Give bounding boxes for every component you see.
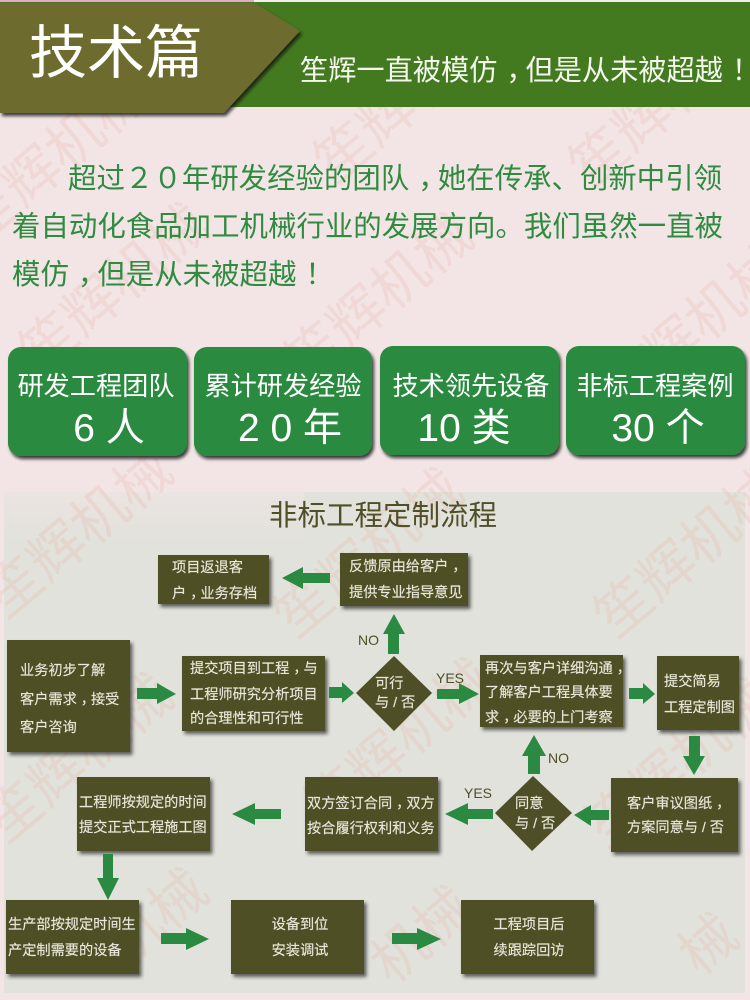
decision: agree: 同意 (515, 795, 543, 812)
label: YES: YES (464, 785, 492, 801)
stat card: team: 6 人 (73, 407, 145, 450)
box: return project: 户 ，业务存档 (172, 585, 257, 602)
stat card: equipment: 技术领先设备 (392, 371, 550, 401)
box: formal drawing (77, 777, 210, 851)
box: install (231, 900, 364, 974)
box: install: 设备到位 (272, 916, 328, 933)
header tab (0, 3, 300, 113)
header banner (0, 0, 750, 113)
decision: feasible (356, 656, 432, 731)
arrow: down to review (683, 736, 705, 775)
arrow: to formal drawing (232, 803, 281, 825)
stat card: experience: 2 0 年 (238, 407, 342, 450)
box: initial understanding: 客户咨询 (20, 719, 77, 736)
box: production: 产定制需要的设备 (8, 942, 122, 959)
decision: agree: 与 / 否 (515, 816, 555, 832)
box: customer review (611, 778, 738, 852)
arrow: to communicate (437, 683, 479, 704)
watermarks: 笙辉机械 (272, 202, 484, 394)
watermarks: 机械 (358, 875, 485, 995)
slogan: 笙辉一直被模仿 ，但是从未被超越 ！ (300, 54, 750, 86)
decision: agree (495, 776, 572, 851)
stat card: team: 研发工程团队 (17, 371, 175, 401)
main title: 技术篇 (29, 21, 203, 86)
box: submit to engineering: 工程师研究分析项目 (190, 687, 318, 703)
stat card: equipment (380, 346, 559, 455)
arrow: to drawing (629, 683, 655, 704)
box: customer review: 方案同意与 / 否 (627, 819, 724, 836)
arrow: to follow up (392, 928, 441, 950)
box: feedback: 提供专业指导意见 (349, 584, 463, 601)
stat card: experience: 累计研发经验 (204, 371, 362, 401)
box: contract (305, 777, 438, 851)
intro paragraph: 超过２０年研发经验的团队 ，她在传承、创新中引领 (68, 163, 722, 195)
box: return project (158, 555, 269, 604)
box: submit to engineering: 的合理性和可行性 (190, 711, 304, 727)
box: production (6, 900, 139, 974)
decision: feasible: 可行 (375, 676, 403, 692)
box: follow up: 续跟踪回访 (494, 942, 564, 959)
box: initial understanding: 业务初步了解 (20, 662, 105, 679)
intro paragraph (12, 163, 723, 291)
intro paragraph: 模仿 ，但是从未被超越 ！ (12, 259, 334, 291)
arrow: up to feedback (383, 614, 405, 654)
box: feedback (340, 553, 468, 606)
box: production: 生产部按规定时间生 (8, 917, 136, 933)
box: formal drawing: 工程师按规定的时间 (79, 795, 207, 811)
box: customer review: 客户审议图纸 ， (627, 795, 730, 812)
stat card: cases: 30 个 (611, 407, 705, 450)
box: return project: 项目返退客 (172, 559, 243, 576)
box: simple drawing: 工程定制图 (664, 700, 735, 716)
box: communicate: 求 ，必要的上门考察 (485, 709, 613, 726)
stat card: experience (194, 347, 372, 456)
box: communicate: 了解客户工程具体要 (485, 684, 613, 701)
stat card: equipment: 10 类 (417, 407, 511, 450)
box: follow up (461, 900, 594, 974)
decision: feasible: 与 / 否 (375, 695, 415, 711)
box: install: 安装调试 (272, 943, 328, 959)
stat card: cases (566, 346, 745, 455)
arrow: up to communicate (522, 735, 546, 774)
stat card: team (8, 347, 187, 456)
box: contract: 按合履行权利和义务 (307, 821, 435, 837)
flowchart panel background (4, 492, 745, 993)
arrow: to return (282, 567, 330, 589)
arrow: to submit (137, 683, 176, 704)
arrow: down to production (97, 854, 119, 900)
box: communicate (480, 655, 631, 727)
label: YES: YES (436, 670, 464, 686)
box: submit to engineering: 提交项目到工程 ，与 (190, 660, 318, 677)
arrow: to contract (445, 803, 493, 825)
label: NO: NO (358, 632, 379, 648)
watermarks: 笙辉机械 (262, 457, 474, 649)
box: initial understanding: 客户需求 ，接受 (20, 691, 119, 708)
watermarks: 机械 (93, 857, 220, 977)
watermarks: 笙辉机械 (7, 192, 219, 384)
arrow: to install (161, 928, 209, 950)
box: communicate: 再次与客户详细沟通 ， (485, 660, 631, 677)
watermarks: 笙辉机械 (302, 2, 514, 194)
box: formal drawing: 提交正式工程施工图 (79, 819, 207, 836)
box: initial understanding (7, 640, 130, 752)
box: follow up: 工程项目后 (494, 917, 564, 933)
intro paragraph: 着自动化食品加工机械行业的发展方向。我们虽然一直被 (12, 211, 723, 243)
watermarks: 笙辉机械 (292, 647, 504, 839)
watermarks: 械 (666, 902, 750, 986)
box: simple drawing: 提交简易 (664, 673, 721, 690)
box: feedback: 反馈原由给客户 ， (349, 558, 467, 575)
arrow: to agree decision (574, 805, 609, 826)
stat card: cases: 非标工程案例 (576, 371, 734, 401)
flowchart title: 非标工程定制流程 (269, 500, 497, 532)
box: simple drawing (657, 656, 739, 730)
label: NO: NO (548, 750, 569, 766)
box: submit to engineering (182, 656, 325, 731)
arrow: to decision (329, 682, 354, 703)
box: contract: 双方签订合同 ，双方 (307, 795, 435, 812)
